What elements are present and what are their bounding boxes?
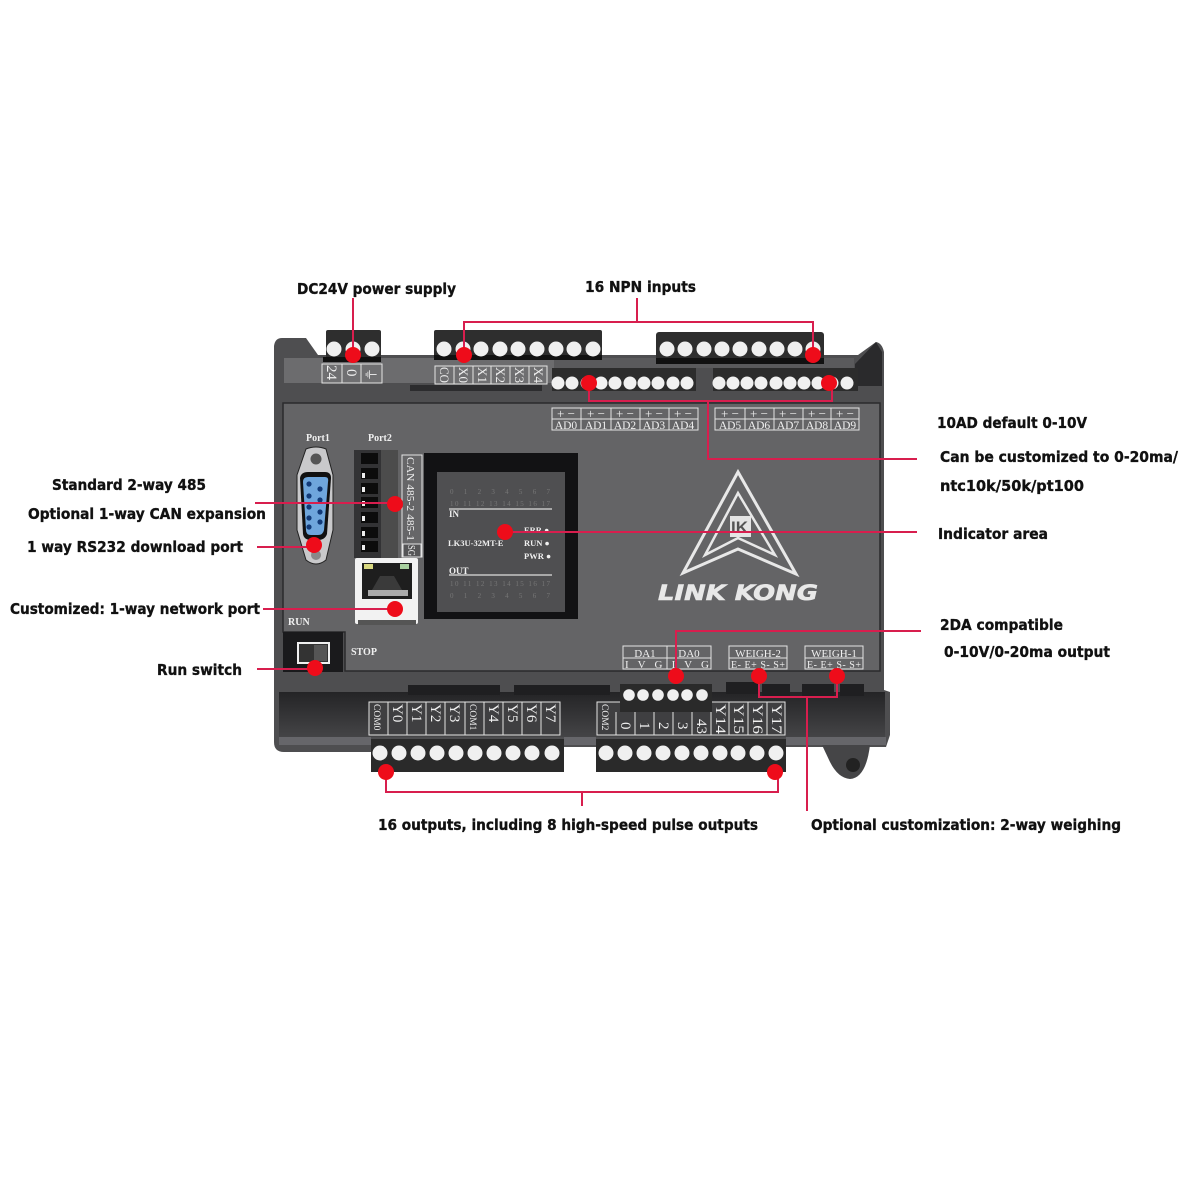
AD labels right: AD7 — [777, 420, 799, 432]
power terminal labels: ⏚ — [363, 368, 378, 381]
WEIGH-1 labels: WEIGH-1 — [811, 648, 857, 660]
AD labels left: + − — [645, 406, 663, 421]
indicator window: 0 1 2 3 4 5 6 7 — [450, 592, 550, 600]
AD labels right: AD8 — [806, 420, 828, 432]
label: NPN inputs: 16 NPN inputs — [585, 278, 696, 296]
AD labels right — [715, 406, 859, 432]
label: AD customization line 1: Can be customized to 0-20ma/ — [940, 448, 1178, 466]
indicator window: RUN ● — [524, 538, 550, 548]
label: AD customization line 2: ntc10k/50k/pt100 — [940, 477, 1084, 495]
AD labels left: AD3 — [643, 420, 665, 432]
top label strip — [284, 342, 882, 391]
Y output labels left: Y5 — [504, 704, 520, 722]
label: 485: Standard 2-way 485 — [52, 476, 206, 494]
X input labels — [435, 366, 547, 384]
label: RS232: 1 way RS232 download port — [27, 538, 243, 556]
Y output labels right: 3 — [674, 722, 690, 730]
port 2 connector: Port2 — [368, 433, 392, 444]
AD terminal block left — [552, 368, 696, 391]
X input labels: X4 — [531, 367, 546, 384]
Y output labels right: Y14 — [712, 704, 728, 735]
AD labels left: AD4 — [672, 420, 694, 432]
X input labels: X3 — [512, 367, 527, 383]
AD labels right: + − — [750, 406, 768, 421]
DA labels: DA0 — [678, 648, 700, 660]
Y output labels right: Y15 — [730, 704, 746, 734]
power terminal labels — [322, 364, 382, 383]
Y output terminal block right — [596, 739, 786, 772]
AD labels right: AD6 — [748, 420, 770, 432]
mounting ear — [822, 745, 870, 779]
Y output labels left: Y1 — [408, 704, 424, 722]
RS232 port 1: Port1 — [306, 433, 330, 444]
DA labels: I V G I V G — [625, 659, 709, 671]
Y output labels left: Y7 — [542, 704, 558, 723]
indicator window: 10 11 12 13 14 15 16 17 — [450, 500, 550, 508]
RS232 port 1 — [297, 433, 333, 564]
DA terminal block — [620, 684, 712, 712]
Y output labels right: 2 — [655, 722, 671, 730]
AD labels left: + − — [616, 406, 634, 421]
brand name: LINK KONG — [658, 581, 818, 605]
X input labels: X1 — [475, 367, 490, 383]
Y output labels right: 0 — [617, 722, 633, 730]
label: AD default: 10AD default 0-10V — [937, 414, 1087, 432]
WEIGH-1 labels — [805, 646, 863, 671]
AD labels left: AD2 — [614, 420, 636, 432]
Y output labels left: Y6 — [523, 704, 539, 723]
label: power supply: DC24V power supply — [297, 280, 456, 298]
AD labels left — [552, 406, 698, 432]
port 2 labels: SG — [405, 545, 416, 556]
Y output labels left: Y2 — [427, 704, 443, 722]
Y output labels left: Y3 — [446, 704, 462, 722]
label: DA output range: 0-10V/0-20ma output — [944, 643, 1110, 661]
Y output terminal block left — [371, 739, 564, 772]
WEIGH-2 labels: E- E+ S- S+ — [731, 660, 785, 671]
port 2 connector — [354, 433, 398, 558]
X input labels: X2 — [493, 367, 508, 383]
Y output labels left: COM0 — [371, 704, 381, 731]
Y output labels right: Y16 — [749, 704, 765, 735]
indicator window: PWR ● — [524, 551, 551, 561]
indicator window: IN — [449, 509, 460, 519]
indicator window: ERR ● — [524, 525, 549, 535]
power terminal labels: 0 — [343, 369, 359, 376]
run switch: STOP — [351, 647, 377, 658]
AD labels right: + − — [721, 406, 739, 421]
logo triangle — [683, 472, 796, 574]
AD labels left: + − — [557, 406, 575, 421]
WEIGH-2 labels — [729, 646, 787, 671]
callout leader lines — [255, 298, 921, 811]
AD labels right: AD9 — [834, 420, 856, 432]
PLC device — [274, 330, 890, 779]
AD labels right: + − — [836, 406, 854, 421]
indicator window: 0 1 2 3 4 5 6 7 — [450, 488, 550, 496]
bottom recess — [279, 682, 886, 745]
DA labels: DA1 — [634, 648, 656, 660]
DA labels — [623, 646, 711, 671]
label: 2DA: 2DA compatible — [940, 616, 1063, 634]
AD labels left: AD0 — [555, 420, 577, 432]
run switch — [283, 617, 377, 672]
indicator window: OUT — [449, 566, 469, 576]
Y output labels right: Y17 — [768, 704, 784, 735]
Y output labels left — [369, 702, 560, 735]
X input labels: X0 — [456, 367, 471, 383]
label: outputs: 16 outputs, including 8 high-speed pulse outputs — [378, 816, 758, 834]
X input terminal block 2 — [656, 332, 824, 364]
indicator window — [424, 453, 578, 619]
Y output labels left: Y4 — [485, 704, 501, 723]
label: CAN: Optional 1-way CAN expansion — [28, 505, 266, 523]
WEIGH-2 labels: WEIGH-2 — [735, 648, 781, 660]
logo triangle: IK — [731, 518, 749, 537]
AD labels right: + − — [779, 406, 797, 421]
Y output labels right: COM2 — [599, 704, 609, 731]
callout marker dots — [306, 347, 845, 780]
label: weighing: Optional customization: 2-way weighing — [811, 816, 1121, 834]
Y output labels left: COM1 — [467, 704, 477, 731]
Y output labels right: 43 — [693, 719, 709, 734]
port 2 labels: CAN 485-2 485-1 — [404, 457, 415, 541]
front panel — [283, 403, 880, 671]
indicator window: LK3U-32MT-E — [448, 538, 504, 548]
Y output labels left: Y0 — [389, 704, 405, 722]
AD terminal block right — [712, 368, 858, 391]
power terminal — [323, 330, 381, 362]
indicator window: 10 11 12 13 14 15 16 17 — [450, 580, 550, 588]
WEIGH-1 labels: E- E+ S- S+ — [807, 660, 861, 671]
port 2 labels — [402, 455, 422, 557]
Y output labels right: 1 — [636, 722, 652, 730]
device body — [274, 338, 890, 752]
AD labels left: + − — [674, 406, 692, 421]
run switch: RUN — [288, 617, 310, 628]
power terminal labels: 24 — [323, 365, 339, 380]
label: run switch: Run switch — [157, 661, 242, 679]
AD labels left: AD1 — [585, 420, 607, 432]
AD labels left: + − — [587, 406, 605, 421]
label: indicator area: Indicator area — [938, 525, 1048, 543]
label: network port: Customized: 1-way network port — [10, 600, 260, 618]
AD labels right: AD5 — [719, 420, 741, 432]
X input labels: CO — [437, 367, 452, 383]
AD labels right: + − — [808, 406, 826, 421]
network port — [355, 558, 418, 625]
X input terminal block 1 — [434, 330, 602, 360]
Y output labels right — [597, 702, 785, 735]
